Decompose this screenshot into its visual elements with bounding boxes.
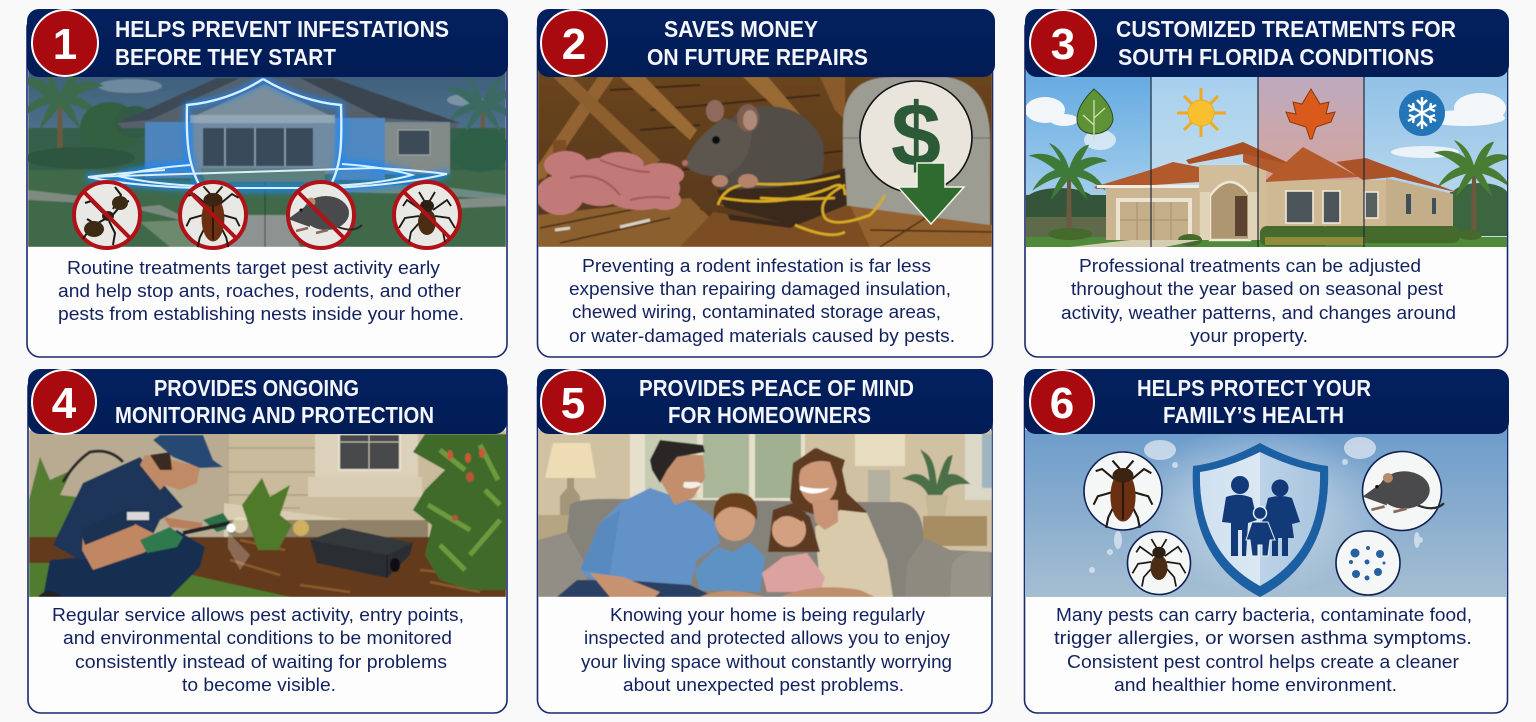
panel 1: helps prevent infestations — [14, 9, 521, 357]
heading 6: FAMILY’S HEALTH — [1163, 402, 1344, 428]
heading 3: SOUTH FLORIDA CONDITIONS — [1118, 44, 1434, 70]
card 5 frame — [538, 375, 992, 713]
heading 6: HELPS PROTECT YOUR — [1137, 375, 1371, 401]
number badge 2: 2 — [562, 20, 586, 69]
heading 5: FOR HOMEOWNERS — [668, 402, 871, 428]
body text 4: consistently instead of waiting for problems — [75, 651, 447, 672]
number badge 4: 4 — [52, 379, 77, 428]
body text 4: to become visible. — [182, 674, 336, 695]
card 6 frame — [1024, 375, 1508, 713]
heading 1: BEFORE THEY START — [115, 44, 337, 70]
icon: no ants — [74, 182, 140, 248]
window — [308, 434, 422, 497]
header bar 2 — [537, 9, 995, 77]
body text 3: Professional treatments can be adjusted — [1079, 255, 1421, 276]
body text 6: Many pests can carry bacteria, contaminate food, — [1056, 604, 1472, 625]
body text 5: inspected and protected allows you to enjoy — [584, 627, 951, 648]
body text 6: Consistent pest control helps create a cleaner — [1067, 651, 1459, 672]
icon: no spiders — [394, 182, 460, 248]
mulch and grass — [29, 537, 506, 597]
illustration: house with protective shield — [14, 65, 521, 247]
arch background — [843, 77, 990, 225]
illustration: family shield and health hazards — [1025, 425, 1507, 597]
body text 6: trigger allergies, or worsen asthma symptoms. — [1054, 627, 1472, 648]
card 2 frame — [538, 15, 992, 357]
left shrub — [29, 457, 77, 537]
body text 1: pests from establishing nests inside your home. — [58, 303, 464, 324]
bright ring and shield outline — [88, 79, 447, 188]
icon: dollar with down arrow: $ — [891, 86, 941, 186]
icon: spring leaf — [1077, 89, 1113, 139]
icon: summer sun — [1177, 88, 1226, 137]
body text 1: Routine treatments target pest activity early — [67, 257, 441, 278]
body text 4: Regular service allows pest activity, entry points, — [52, 604, 464, 625]
icon: no roaches — [180, 182, 246, 248]
centre plant — [242, 478, 292, 550]
shrubs — [1048, 226, 1482, 246]
header bar 5 — [537, 369, 993, 434]
header bar 3 — [1025, 9, 1509, 77]
header bar 4 — [28, 369, 507, 434]
icon: no rodents — [288, 182, 362, 248]
icon: dollar with down arrow — [860, 81, 972, 224]
technician — [38, 435, 250, 597]
number badge 6: 6 — [1050, 379, 1074, 428]
heading 2: ON FUTURE REPAIRS — [647, 44, 868, 70]
heading 4: PROVIDES ONGOING — [154, 375, 359, 401]
icon: bacteria circle — [1336, 531, 1400, 595]
body text 2: Preventing a rodent infestation is far less — [582, 255, 931, 276]
chewed wire nest — [700, 168, 885, 235]
header bar 6 — [1024, 369, 1509, 434]
body text 5: about unexpected pest problems. — [623, 674, 904, 695]
heading 5: PROVIDES PEACE OF MIND — [639, 375, 914, 401]
card 4 frame — [28, 375, 507, 713]
icon: rodent circle — [1362, 452, 1444, 530]
body text 2: chewed wiring, contaminated storage areas, — [572, 301, 941, 322]
card 3 frame — [1025, 15, 1508, 357]
body text 3: your property. — [1190, 325, 1308, 346]
number badge 4 — [32, 370, 96, 434]
body text 1: and help stop ants, roaches, rodents, and other — [58, 280, 461, 301]
heading 4: MONITORING AND PROTECTION — [115, 402, 434, 428]
number badge 1: 1 — [53, 20, 77, 69]
illustration: technician inspecting bait box — [29, 430, 507, 597]
panel 3: customized treatments — [1025, 9, 1513, 357]
number badge 1 — [32, 10, 98, 76]
panel 5: peace of mind — [537, 369, 993, 713]
illustration: rat chewing wires in attic — [536, 70, 992, 247]
number badge 5 — [541, 370, 605, 434]
panel 2: saves money on future repairs — [536, 9, 995, 357]
boy — [695, 493, 765, 592]
illustration: family on sofa — [538, 430, 992, 597]
bait box — [310, 528, 413, 578]
body text 2: expensive than repairing damaged insulation, — [569, 278, 951, 299]
heading 2: SAVES MONEY — [664, 16, 818, 42]
number badge 5: 5 — [561, 379, 585, 428]
sofa — [538, 499, 992, 597]
seasonal sky bands — [1026, 70, 1507, 247]
body text 5: your living space without constantly worrying — [581, 651, 952, 672]
lamp — [538, 443, 596, 545]
panel 4: ongoing monitoring — [28, 369, 507, 713]
number badge 2 — [541, 10, 607, 76]
icon: autumn maple leaf — [1286, 89, 1335, 139]
body text 3: throughout the year based on seasonal pest — [1071, 278, 1443, 299]
house — [1094, 142, 1459, 240]
icon: roach circle — [1084, 452, 1162, 530]
icon: spider circle — [1128, 532, 1190, 594]
panel 6: protects family health — [1024, 369, 1509, 713]
body text 3: activity, weather patterns, and changes around — [1061, 302, 1456, 323]
icon row: prohibited pests — [74, 182, 460, 248]
girl — [762, 503, 825, 592]
header bar 1 — [27, 9, 508, 77]
body text 4: and environmental conditions to be monitored — [63, 627, 452, 648]
man — [557, 440, 720, 597]
shield with family — [1193, 443, 1328, 597]
icon: winter snowflake — [1399, 90, 1445, 136]
blue glow — [87, 79, 447, 188]
number badge 3 — [1030, 10, 1096, 76]
woman — [790, 448, 893, 597]
body text 2: or water-damaged materials caused by pests. — [569, 325, 955, 346]
number badge 6 — [1030, 370, 1094, 434]
body text 5: Knowing your home is being regularly — [610, 604, 926, 625]
card 1 frame — [27, 15, 507, 357]
heading 1: HELPS PREVENT INFESTATIONS — [115, 16, 449, 42]
right bush — [413, 434, 507, 590]
potted plant — [908, 455, 987, 546]
heading 3: CUSTOMIZED TREATMENTS FOR — [1116, 16, 1456, 42]
illustration: home through four seasons — [1025, 70, 1513, 247]
rat — [682, 100, 824, 190]
number badge 3: 3 — [1051, 20, 1075, 69]
body text 6: and healthier home environment. — [1114, 674, 1397, 695]
